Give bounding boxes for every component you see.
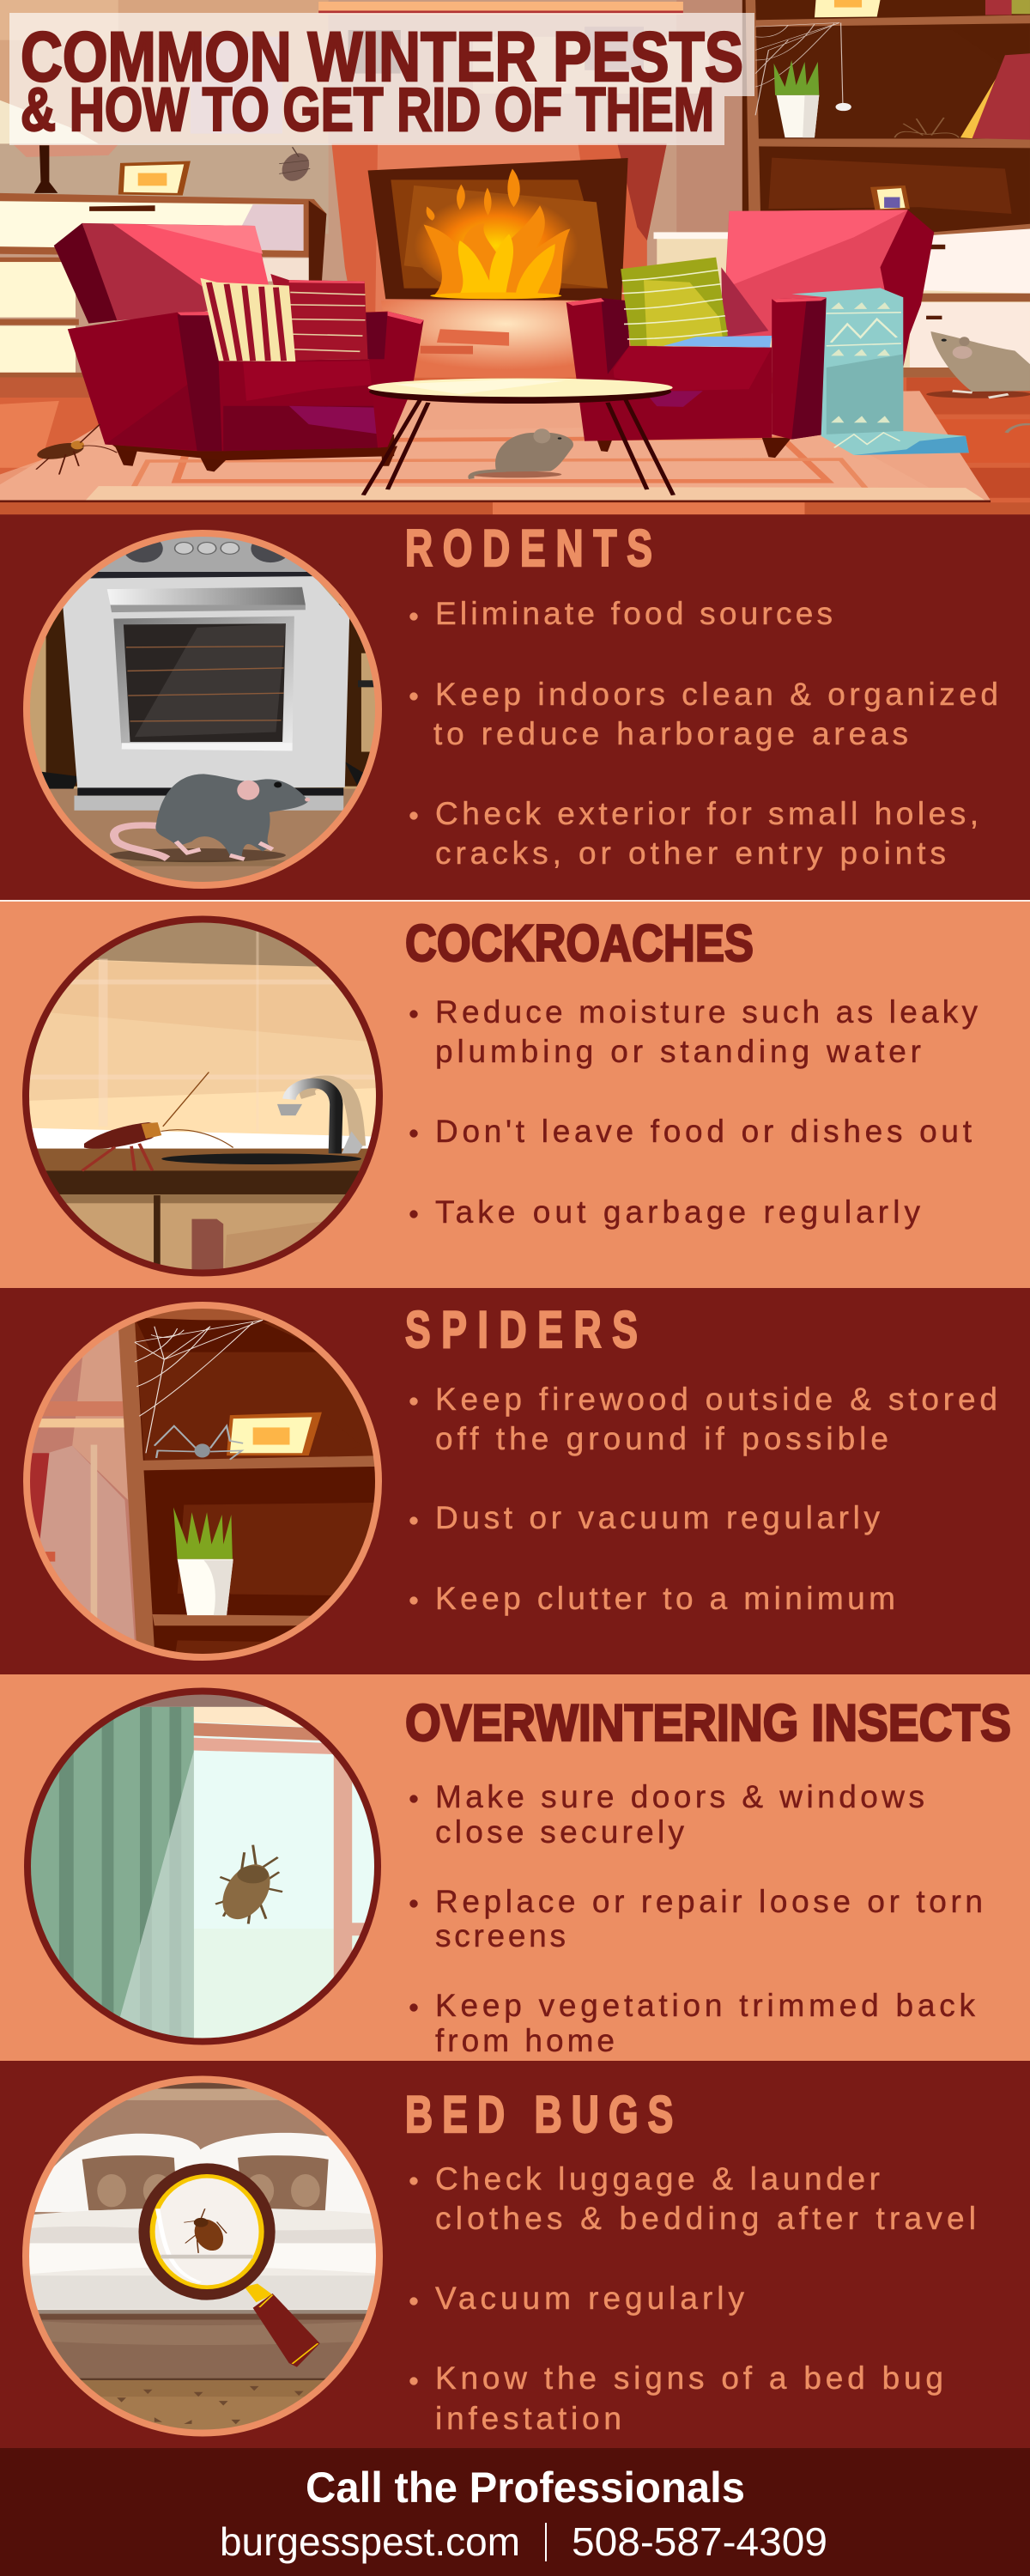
- wall pictures behind the title: [191, 37, 282, 134]
- icon: cockroach: [82, 1072, 233, 1170]
- spider hanging: [835, 103, 851, 111]
- hero illustration: living room: [0, 0, 1030, 525]
- roach on wall: [282, 153, 309, 181]
- chimney: [331, 143, 667, 378]
- bullet list: bed bugs: infestation: [435, 2401, 621, 2436]
- mouse center: [470, 428, 573, 479]
- illustration: oven and rat: [23, 530, 382, 889]
- title backing panels: [9, 13, 754, 145]
- bullet list: overwintering insects: Keep vegetation trimmed back: [435, 1988, 975, 2023]
- illustration: window and insect: [0, 1682, 407, 2057]
- blanket: [663, 288, 969, 455]
- dresser: [0, 193, 326, 258]
- fireplace: [368, 158, 628, 301]
- bullet list: overwintering insects: from home: [435, 2023, 615, 2058]
- heading: rodents: RODENTS: [405, 520, 652, 578]
- bullet list: bed bugs: clothes & bedding after travel: [435, 2201, 976, 2236]
- bullet list: spiders: Keep firewood outside & stored: [435, 1382, 997, 1417]
- bullet list: rodents: cracks, or other entry points: [435, 835, 946, 871]
- frame: [227, 1413, 322, 1455]
- heading: spiders: SPIDERS: [405, 1302, 638, 1359]
- cobweb: [755, 22, 843, 115]
- fire: [424, 205, 570, 295]
- floor: [0, 378, 1030, 503]
- footer heading: Call the Professionals: [306, 2464, 745, 2512]
- right cabinets: [657, 232, 1030, 373]
- bullet list: bed bugs: Check luggage & launder: [435, 2161, 880, 2196]
- lamp: [0, 100, 99, 143]
- bullet list: rodents: Check exterior for small holes,: [435, 796, 978, 831]
- books: [960, 79, 996, 139]
- bullet list: rodents: Keep indoors clean & organized: [435, 677, 998, 712]
- illustration: bed and magnifier: [0, 2070, 407, 2449]
- bullet list: rodents: Eliminate food sources: [435, 596, 833, 631]
- rug: [0, 391, 991, 501]
- title line 1: COMMON WINTER PESTS: [21, 18, 743, 96]
- bullet list: spiders: [410, 1382, 997, 1616]
- bookshelf: [742, 0, 1030, 234]
- mouse right: [926, 331, 1030, 433]
- bullet list: overwintering insects: Make sure doors & windows: [435, 1779, 924, 1814]
- bullet list: cockroaches: plumbing or standing water: [435, 1034, 921, 1069]
- title: [9, 13, 754, 145]
- bullet list: overwintering insects: [410, 1779, 983, 2058]
- pillows: left chair: [200, 274, 368, 361]
- bullet list: rodents: [410, 596, 998, 871]
- bullet list: spiders: Keep clutter to a minimum: [435, 1581, 895, 1616]
- bullet list: overwintering insects: screens: [435, 1918, 566, 1953]
- panel: spiders: [23, 1302, 996, 1661]
- bullet list: spiders: Dust or vacuum regularly: [435, 1500, 881, 1535]
- title line 2: & HOW TO GET RID OF THEM: [21, 76, 714, 144]
- heading: bed bugs: BED BUGS: [405, 2087, 673, 2144]
- panel: bed bugs: [0, 2061, 1030, 2449]
- small picture on shelf: [870, 185, 910, 210]
- pillow: green: [621, 258, 728, 346]
- bullet list: spiders: off the ground if possible: [435, 1421, 888, 1456]
- bullet list: cockroaches: Take out garbage regularly: [435, 1194, 920, 1230]
- bullet list: cockroaches: [410, 994, 978, 1230]
- table: [363, 378, 673, 495]
- illustration: sink and cockroach: [22, 915, 383, 1276]
- illustration: shelf with spider: [23, 1302, 382, 1661]
- bullet list: bed bugs: [410, 2161, 976, 2436]
- left armchair: [54, 223, 424, 471]
- footer: call to action: [0, 2448, 1030, 2576]
- plant: [173, 1507, 233, 1559]
- bullet list: cockroaches: Reduce moisture such as leaky: [435, 994, 978, 1030]
- cockroach on rug: [33, 424, 117, 475]
- spider: [154, 1426, 243, 1460]
- spider on shelf: [894, 118, 959, 137]
- bullet list: overwintering insects: Replace or repair loose or torn: [435, 1884, 983, 1919]
- bullet list: cockroaches: Don't leave food or dishes out: [435, 1114, 972, 1149]
- icon: magnifying glass: [138, 2163, 320, 2367]
- icon: rat: [108, 774, 310, 862]
- panel: overwintering insects: [0, 1674, 1030, 2061]
- footer website: burgesspest.com: [220, 2519, 520, 2564]
- picture frame: [118, 161, 191, 196]
- footer phone: 508-587-4309: [572, 2519, 827, 2564]
- bullet list: bed bugs: Know the signs of a bed bug: [435, 2360, 943, 2396]
- bullet list: overwintering insects: close securely: [435, 1814, 685, 1850]
- heading: cockroaches: COCKROACHES: [405, 914, 754, 972]
- panel: cockroaches: [0, 902, 1030, 1288]
- bullet list: bed bugs: Vacuum regularly: [435, 2281, 745, 2316]
- plant: [774, 60, 819, 95]
- bullet list: rodents: to reduce harborage areas: [433, 716, 908, 751]
- wall: [0, 0, 956, 378]
- icon: stink bug: [214, 1845, 282, 1924]
- panel: rodents: [0, 515, 1030, 902]
- right armchair: [566, 210, 934, 458]
- web: [135, 1320, 263, 1453]
